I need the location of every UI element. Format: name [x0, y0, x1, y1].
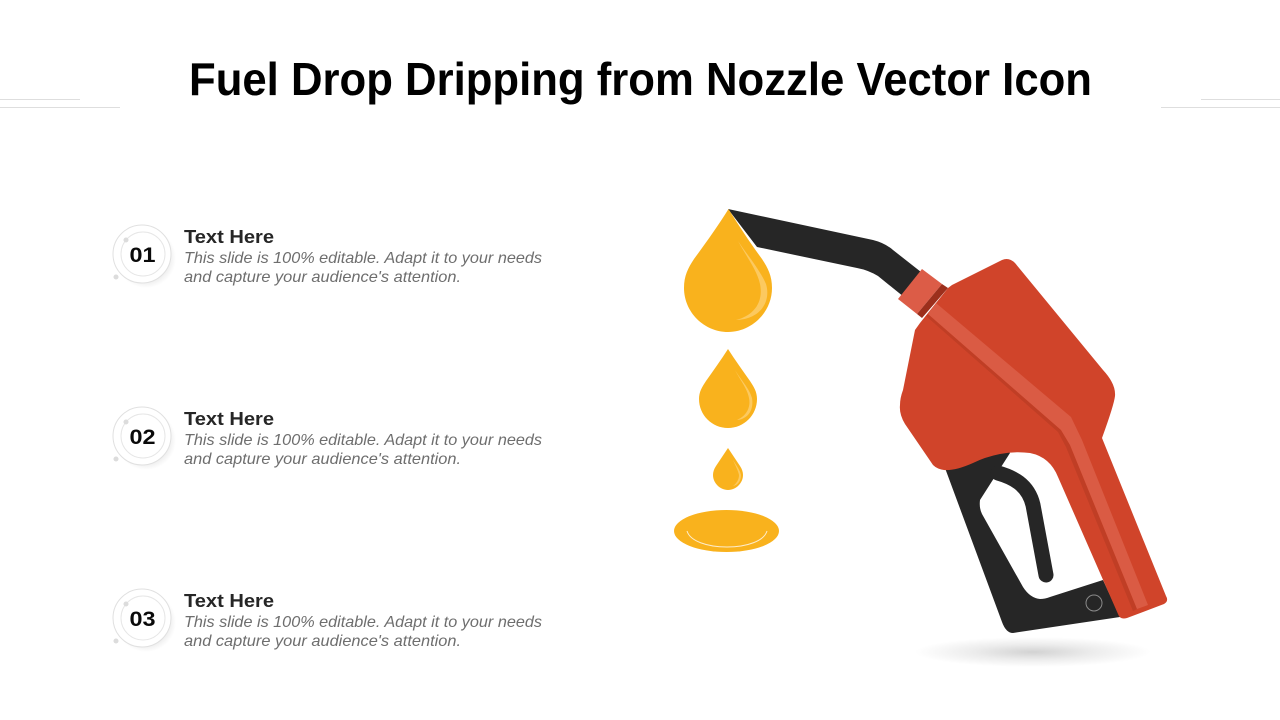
text block 02: and capture your audience's attention. — [184, 451, 461, 468]
text block 03: This slide is 100% editable. Adapt it to your needs — [184, 614, 542, 631]
item 03 — [113, 589, 542, 652]
text block 03: Text Here — [184, 591, 274, 611]
text block 01: and capture your audience's attention. — [184, 269, 461, 286]
badge 02: 02 — [130, 426, 156, 449]
text block 01: This slide is 100% editable. Adapt it to your needs — [184, 250, 542, 267]
icon: fuel puddle — [674, 510, 779, 552]
icon: fuel nozzle — [728, 209, 1167, 633]
collar band — [917, 284, 948, 318]
text block 01: Text Here — [184, 227, 274, 247]
badge 01: 01 — [130, 244, 156, 267]
badge 01 — [113, 225, 176, 288]
icon: medium drop — [699, 349, 757, 428]
badge 02 — [113, 407, 176, 470]
icon: nozzle shadow — [915, 637, 1151, 667]
icon: large drop — [684, 209, 772, 332]
item 01 — [113, 225, 542, 288]
hose — [728, 209, 921, 297]
badge 03: 03 — [130, 608, 156, 631]
nozzle body — [900, 259, 1167, 618]
item 02 — [113, 407, 542, 470]
text block 02: This slide is 100% editable. Adapt it to your needs — [184, 432, 542, 449]
trigger — [998, 473, 1046, 575]
text block 03: and capture your audience's attention. — [184, 633, 461, 650]
text block 02: Text Here — [184, 409, 274, 429]
text block 03 — [184, 591, 542, 650]
screw — [1086, 595, 1102, 611]
collar — [898, 269, 942, 314]
grip and guard — [945, 450, 1120, 633]
body stripe — [928, 303, 1148, 609]
body stripe shade — [926, 314, 1137, 611]
title: Fuel Drop Dripping from Nozzle Vector Icon — [189, 53, 1092, 105]
icon: small drop — [713, 448, 743, 490]
text block 02 — [184, 409, 542, 468]
text block 01 — [184, 227, 542, 286]
badge 03 — [113, 589, 176, 652]
